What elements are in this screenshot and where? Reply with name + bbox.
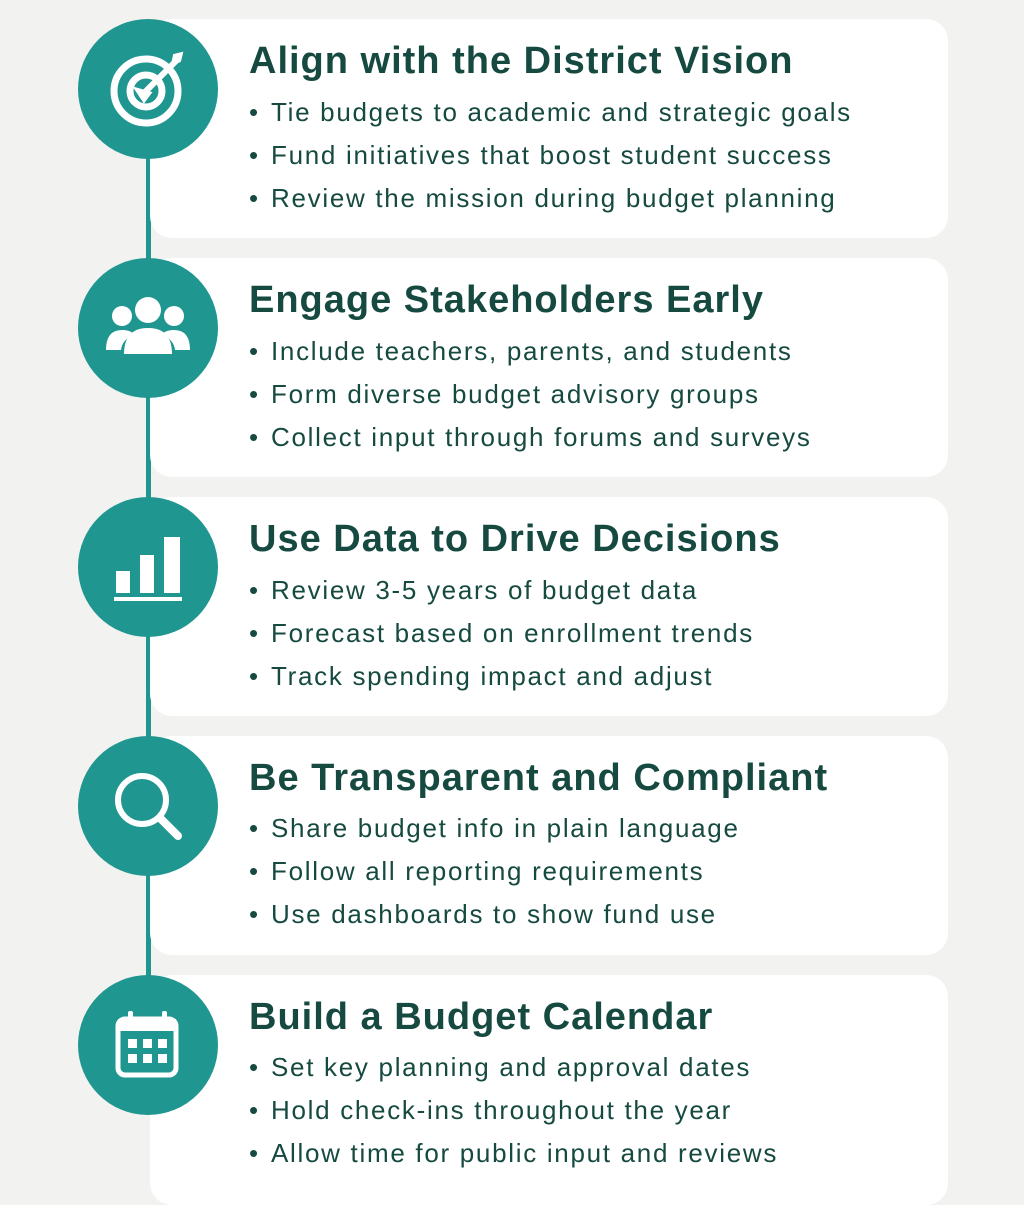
icon: bar chart: [78, 497, 218, 637]
bullets 1: Tie budgets to academic and strategic goals: [271, 97, 852, 127]
card 3: [150, 497, 948, 716]
bullets 1: [250, 97, 852, 213]
bullets 4: Share budget info in plain language: [271, 813, 740, 843]
bullets 2: Form diverse budget advisory groups: [271, 379, 760, 409]
bullets 4: [250, 813, 740, 929]
bullets 5: Hold check-ins throughout the year: [271, 1095, 732, 1125]
bullets 3: [250, 575, 754, 691]
title 4: Be Transparent and Compliant: [249, 757, 828, 799]
bullets 3: Track spending impact and adjust: [271, 661, 713, 691]
bullets 4: Use dashboards to show fund use: [271, 899, 717, 929]
bullets 1: Fund initiatives that boost student success: [271, 140, 833, 170]
bullets 3: Review 3-5 years of budget data: [271, 575, 698, 605]
title 1: Align with the District Vision: [249, 40, 793, 82]
card 5: [150, 975, 948, 1205]
bullets 4: Follow all reporting requirements: [271, 856, 704, 886]
bullets 3: Forecast based on enrollment trends: [271, 618, 754, 648]
bullets 1: Review the mission during budget planning: [271, 183, 836, 213]
icon: target: [78, 19, 218, 159]
title 5: Build a Budget Calendar: [249, 996, 713, 1038]
card 2: [150, 258, 948, 477]
bullets 5: Allow time for public input and reviews: [271, 1138, 778, 1168]
title 3: Use Data to Drive Decisions: [249, 518, 781, 560]
title 2: Engage Stakeholders Early: [249, 279, 764, 321]
card 1: [150, 19, 948, 238]
bullets 5: Set key planning and approval dates: [271, 1052, 751, 1082]
card 4: [150, 736, 948, 955]
bullets 5: [250, 1052, 778, 1168]
icon: calendar: [78, 975, 218, 1115]
bullets 2: [250, 336, 812, 452]
icon: people: [78, 258, 218, 398]
icon: magnifier: [78, 736, 218, 876]
bullets 2: Include teachers, parents, and students: [271, 336, 793, 366]
bullets 2: Collect input through forums and surveys: [271, 422, 812, 452]
